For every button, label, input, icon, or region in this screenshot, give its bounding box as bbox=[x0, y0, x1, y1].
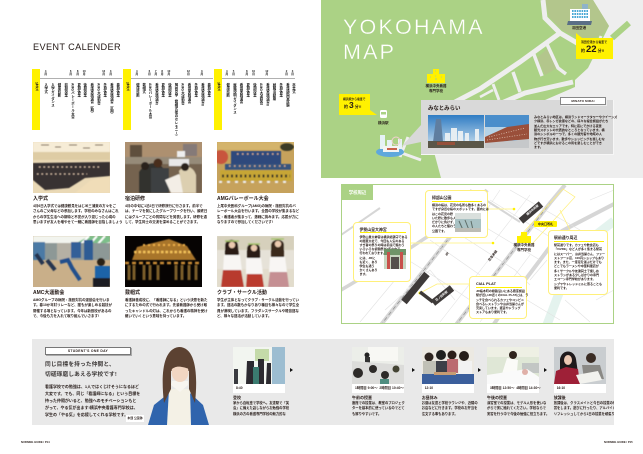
heading: student message: 切磋琢磨しあえる学校です! bbox=[45, 372, 117, 378]
callout: shrine bbox=[353, 222, 411, 282]
heading: cial plat: CIAL PLAT bbox=[476, 280, 496, 286]
heading: entrance ceremony: さんのご父母などの参加します。学校のみなさんはこれ bbox=[33, 209, 119, 213]
text: arrival bbox=[233, 395, 289, 423]
text: morning class bbox=[352, 395, 408, 423]
label: student name bbox=[126, 415, 144, 422]
callout: cial plat bbox=[469, 276, 527, 319]
text: cial plat description: JR桜木町の線路沿いにある商業施設 bbox=[476, 289, 525, 293]
timeline: second year: 解剖見学（戴帽式後のセレモニー） bbox=[174, 83, 178, 138]
timeline: second year: 2年生 bbox=[126, 82, 130, 90]
text: shrine description: には、JRに bbox=[360, 256, 375, 260]
panel: minato mirai bbox=[421, 100, 614, 155]
text: shrine description: いろいろな祈願祭が1年の中で bbox=[360, 247, 400, 251]
photo: valley training bbox=[125, 142, 202, 193]
heading: sports day: す。春10か年対リレーなど、誰もが楽しめる競技が bbox=[33, 303, 112, 307]
heading: valley training bbox=[125, 195, 207, 224]
text: afternoon class bbox=[487, 395, 543, 423]
timeline: second year: 健康診断 bbox=[135, 83, 139, 97]
heading: capping ceremony: 看護師養成校に、「看護師になる」という決意を新た bbox=[125, 298, 207, 302]
timeline: third year: 月 bbox=[285, 72, 288, 76]
heading: volleyball tournament: 生・看護者が集まって、激戦に挑みます。応援が力に bbox=[217, 215, 299, 219]
timeline: first year: 前期授業 bbox=[64, 83, 68, 97]
heading: valley training: にはグループごとの質問などを発表します。研修を通 bbox=[125, 215, 207, 219]
heading: valley training: 4月の中旬に1泊2日で研修旅行に行きます。前半で bbox=[125, 204, 203, 208]
title: yokohama map bbox=[343, 15, 485, 64]
heading: valley training: 宿泊研修 bbox=[125, 196, 145, 202]
timeline: third year: 健康診断 bbox=[226, 83, 230, 97]
label: student name: 木部 公菜弥 bbox=[127, 416, 143, 420]
heading: park: 掃部山公園 bbox=[432, 194, 451, 200]
timeline: third year: 月 bbox=[225, 72, 228, 76]
icon: train bbox=[380, 110, 387, 118]
timeline: second year: 月 bbox=[167, 72, 170, 76]
heading: club activities bbox=[217, 289, 300, 318]
timeline: third year: 月 bbox=[245, 72, 248, 76]
heading: valley training: して、学生同士の交流を深めることができます。 bbox=[125, 220, 200, 224]
label: airport: 羽田空港 bbox=[572, 26, 586, 30]
timeline: first year: 8 bbox=[77, 69, 78, 73]
heading: capping ceremony bbox=[125, 289, 208, 318]
text: cial plat description: 駅が近いJR近くのCIAL PLATには、ラ bbox=[476, 293, 528, 297]
text: student message body: 看護学校での勉強は、1人ではくじけそうになるほど bbox=[45, 384, 139, 389]
heading: entrance ceremony: からの学生生活への期待と不安が入り混じった心境の bbox=[33, 215, 116, 219]
timeline: second year: 月 bbox=[148, 72, 151, 76]
photo: park bbox=[455, 213, 481, 232]
text: park description: いた際に散歩も人 bbox=[432, 216, 456, 220]
text: station street description: 「ViVRE」など人が多く集まる駅前 bbox=[554, 247, 602, 251]
card: morning class: 1時間目 9:00〜 2時間目 10:40〜 bbox=[355, 386, 404, 390]
text: station street description: 駅前通りです。カフェや飲食店も bbox=[554, 243, 599, 247]
timeline: third year: 月 bbox=[265, 72, 268, 76]
text: station street description: エコーン専門学校があります。 bbox=[554, 277, 596, 281]
icon: harbor skyline bbox=[376, 135, 404, 157]
card: afternoon class: 3時間目 12:50〜 4時間目 14:30〜 bbox=[490, 386, 541, 390]
timeline: second year: AMGバレーボール大会 bbox=[148, 83, 152, 119]
timeline: first year: 看護実践演習（I期） bbox=[90, 83, 94, 115]
text: shrine description: 伊勢山皇大神宮は横浜総鎮守である bbox=[360, 234, 407, 238]
heading: volleyball tournament bbox=[217, 195, 300, 224]
label: school name bbox=[426, 84, 446, 93]
timeline: second year: 7 bbox=[155, 69, 157, 73]
timeline: first year: 月 bbox=[69, 72, 72, 76]
timeline: second year: 看護実践演習II bbox=[200, 83, 204, 106]
heading: student message: 同じ目標を持った仲間と、 bbox=[45, 362, 115, 368]
heading: entrance ceremony: 思いますが友人を増やせて一緒に看護師を目指しましょう bbox=[33, 220, 122, 224]
text: shrine description: 行われております。学校では bbox=[360, 251, 398, 255]
text: minato mirai description: 浜のシンボルの一つで、多くの観光客や地域の人 bbox=[534, 132, 602, 136]
timeline: third year: 月 bbox=[252, 72, 255, 76]
heading: station street: 駅前通り周辺 bbox=[554, 234, 577, 240]
timeline: third year: 就職活動期 bbox=[272, 83, 276, 100]
text: morning class: も解りやすいです。 bbox=[352, 412, 381, 416]
text: park description: だかりに負けず、 bbox=[432, 220, 456, 224]
card: arrival at school bbox=[233, 339, 289, 425]
timeline: first year: 後期授業 bbox=[83, 83, 87, 97]
callout: 3 minutes from yokohama station bbox=[339, 94, 377, 115]
text: student message body: 持った仲間がいると、勉強へのモチベーションもと bbox=[45, 398, 136, 403]
timeline: second year: 冬期休業 bbox=[194, 83, 198, 97]
photo: shrine bbox=[384, 249, 406, 269]
timeline: second year: 8 bbox=[161, 69, 163, 73]
title: yokohama map: MAP bbox=[343, 40, 396, 64]
text: shrine description: の関東大社で、今回も人気のある bbox=[360, 239, 404, 243]
tag: school surroundings bbox=[342, 185, 373, 200]
text: minato mirai description: 観光スポットの代表的なところとなっています。横 bbox=[534, 128, 605, 132]
panel: school surroundings bbox=[341, 184, 614, 324]
tag: minato mirai: MINATO MIRAI bbox=[571, 99, 595, 103]
label: school name: 専門学校 bbox=[429, 89, 443, 93]
heading: capping ceremony: ったキャンドルの灯は、これからも看護の精神を受け bbox=[125, 309, 208, 313]
text: park description: 横浜の桜は、花見の名所も数多くあるの bbox=[432, 203, 486, 207]
text: station street description: ストランがある少しばかりの専門 bbox=[554, 273, 599, 277]
text: station street description bbox=[554, 243, 605, 290]
timeline: second year: 月 bbox=[154, 72, 157, 76]
heading: valley training: は、テーマを発にしたグループワークを行い、最終日 bbox=[125, 209, 207, 213]
callout: 3 minutes from yokohama station: 約3分!! bbox=[344, 100, 361, 110]
photo: sports day bbox=[33, 236, 110, 287]
timeline: third year: 2 bbox=[286, 69, 287, 73]
photo: student portrait bbox=[148, 345, 210, 425]
card: after school: 16:10 bbox=[557, 386, 565, 390]
callout: 3 minutes from yokohama station: 横浜駅から電車で bbox=[343, 96, 365, 100]
heading: club activities: 員が満喫しています。フラダンスサークルや軽音部な bbox=[217, 309, 299, 313]
tag: student's one day: STUDENT'S ONE DAY bbox=[68, 349, 108, 353]
timeline: second year bbox=[123, 69, 213, 138]
timeline: second year: 10 bbox=[167, 69, 170, 73]
timeline: first year: 12 bbox=[102, 69, 105, 73]
heading: sports day: で、今後も力を入れて取り組んでいきます! bbox=[33, 314, 99, 318]
timeline: first year: 入学ガイダンス bbox=[50, 83, 54, 107]
text: afternoon class: 午後の授業 bbox=[487, 395, 507, 400]
heading: capping ceremony: 継いでいくという意味を持っています。 bbox=[125, 314, 186, 318]
timeline: first year: 月 bbox=[76, 72, 79, 76]
text: station street description: にはスーパー、お弁当屋さん、ファー bbox=[554, 252, 605, 256]
text: afternoon class: 実習を行う中で今後の勉強に役立ちます。 bbox=[487, 412, 549, 416]
heading: club activities: 学生が主体となってクラブ・サークル活動を行ってい bbox=[217, 298, 299, 302]
card: afternoon class bbox=[487, 339, 543, 425]
timeline: third year: 就職説明ガイダンス bbox=[232, 83, 236, 114]
photo: red brick warehouse bbox=[485, 115, 529, 148]
title: yokohama map: YOKOHAMA bbox=[343, 15, 485, 39]
heading: shrine: 伊勢山皇大神宮 bbox=[360, 226, 387, 232]
map: streets around the school bbox=[342, 185, 613, 323]
label: station, rail names bbox=[400, 204, 540, 302]
timeline: third year bbox=[214, 69, 296, 130]
label: station, rail names: 桜木町駅 bbox=[400, 285, 410, 297]
timeline: third year: 3 bbox=[292, 69, 293, 73]
timeline: first year: 看護実践演習（II期） bbox=[109, 83, 113, 116]
timeline: first year: 春期休業 bbox=[116, 83, 120, 97]
timeline: first year: 健康診断 bbox=[57, 83, 61, 97]
text: lunch break bbox=[422, 395, 478, 423]
timeline: first year: 夏期休業 bbox=[77, 83, 81, 97]
label: station, rail names: 日ノ出町駅 bbox=[434, 290, 449, 302]
icon: airport building bbox=[567, 4, 592, 25]
card: arrival at school: 8:40 bbox=[236, 386, 243, 390]
text: park description: 公園です。 bbox=[432, 229, 447, 233]
map: green land and roads bbox=[321, 0, 643, 178]
timeline: third year: 夏期休業 bbox=[246, 83, 250, 97]
heading: sports day: AMC大運動会 bbox=[33, 290, 64, 296]
text: minato mirai description: どですが横浜におけるこの街を楽しむことができ bbox=[534, 141, 602, 145]
callout: 22 minutes from airport: 羽田空港から電車で bbox=[581, 40, 607, 44]
photo: entrance ceremony bbox=[33, 142, 110, 193]
label: school name: 横浜中央看護 bbox=[426, 84, 446, 88]
tag: student's one day bbox=[45, 347, 131, 355]
timeline: third year: 後期授業 bbox=[252, 83, 256, 97]
heading: volleyball tournament: 上尾中央医科グループ(AMG)の病院・施設対抗のバ bbox=[217, 204, 296, 208]
text: afternoon class: がらで実に触れてください。学校ならで bbox=[487, 406, 546, 410]
heading: sports day: 開催する場となっています。今年は新設校があるの bbox=[33, 309, 111, 313]
timeline: first year: 月 bbox=[102, 72, 105, 76]
text: arrival: 登校 bbox=[233, 395, 241, 400]
timeline: first year: AMG大運動会 bbox=[96, 83, 100, 105]
arrow bbox=[478, 368, 481, 372]
timeline: first year bbox=[32, 69, 122, 130]
text: shrine description: すぎ者の祭りの時は参詣で賑わう bbox=[360, 243, 405, 247]
text: arrival: 会」に備えた話しながらお勉強の学校 bbox=[233, 406, 289, 410]
callout: 22 minutes from airport bbox=[576, 33, 613, 59]
timeline: first year: AMGバレーボール大会 bbox=[70, 83, 74, 119]
photo: skyline bbox=[428, 115, 484, 148]
timeline: third year: 看護実践演習 bbox=[239, 83, 243, 104]
label: school name: 専門学校 bbox=[517, 248, 531, 252]
text: station street description: どこでもラーメンや中華料理店が bbox=[554, 264, 599, 268]
heading: entrance ceremony: 入学式 bbox=[33, 196, 48, 202]
heading: entrance ceremony bbox=[33, 195, 122, 224]
timeline: second year: 3 bbox=[201, 69, 203, 73]
heading: volleyball tournament: なりますので参加してくださいです! bbox=[217, 220, 273, 224]
photo: capping ceremony bbox=[125, 236, 202, 287]
text: minato mirai description: ます。 bbox=[534, 145, 543, 149]
timeline: second year: 夏期休業 bbox=[161, 83, 165, 97]
text: minato mirai description: 物が行き交います。散歩やショッピングを楽しむな bbox=[534, 137, 605, 141]
arrow bbox=[544, 368, 547, 372]
timeline: third year: 月 bbox=[232, 72, 235, 76]
text: lunch break: お昼は友達と学校ラウンジや、近隣の bbox=[422, 401, 478, 405]
timeline: second year: 春期休業 bbox=[207, 83, 211, 97]
timeline: first year: 月 bbox=[83, 72, 86, 76]
text: morning class: 座席での授業は、教室のプロジェク bbox=[352, 401, 405, 405]
text: station street description: 多くサークルや友達同士で楽しめ bbox=[554, 269, 599, 273]
text: park description: はこの花見の際 bbox=[432, 212, 453, 216]
text: station street description: ストフード店、100円ショップもあり bbox=[554, 256, 604, 260]
timeline: second year: 月 bbox=[187, 72, 190, 76]
timeline: second year: 4 bbox=[136, 69, 138, 73]
timeline: second year: 月 bbox=[161, 72, 164, 76]
text: shrine description: も近く、あり bbox=[360, 260, 378, 264]
timeline: third year: 4 bbox=[226, 69, 228, 73]
tag: school surroundings: 学校周辺 bbox=[349, 190, 366, 195]
photo: club activities bbox=[217, 236, 294, 287]
text: cial plat description: ストアもあり便利です。 bbox=[476, 310, 509, 314]
timeline: first year: 1年生 bbox=[35, 82, 39, 90]
callout: 22 minutes from airport: 約22分!! bbox=[581, 44, 604, 55]
timeline: first year: 入学式 bbox=[44, 83, 48, 93]
heading: sports day: AMGグループの病院・施設対抗の運動会を行いま bbox=[33, 298, 110, 302]
label: station, rail names: 横浜中央駅 bbox=[525, 204, 540, 216]
text: station street description: 便利です。 bbox=[554, 286, 569, 290]
text: shrine description: 学生も通う bbox=[360, 264, 375, 268]
tag: central gate bbox=[534, 221, 557, 227]
timeline: third year: 8 bbox=[246, 69, 248, 73]
timeline: third year: 月 bbox=[291, 72, 294, 76]
text: minato mirai description: 並んだ広大なエリアです。特に夜にでかける夜景 bbox=[534, 124, 602, 128]
heading: sports day bbox=[33, 289, 112, 318]
timeline: third year: 10 bbox=[252, 69, 255, 73]
text: park description: の人たちと賑わう bbox=[432, 224, 456, 228]
text: cial plat description: 充実しています。雑貨やドラッグ bbox=[476, 306, 521, 310]
text: after school bbox=[554, 395, 610, 423]
timeline: second year: 月 bbox=[200, 72, 203, 76]
text: student message body: がって、やる気が出ます!横浜中央看護専門学校は、 bbox=[45, 405, 138, 410]
heading: club activities: ます。部活の数もかなりあり種目も様々なので学生全 bbox=[217, 303, 299, 307]
timeline: second year: 月 bbox=[135, 72, 138, 76]
text: morning class: ターを基本的に使っているのでとて bbox=[352, 406, 404, 410]
heading: capping ceremony: 戴帽式 bbox=[125, 290, 140, 296]
photo: volleyball tournament bbox=[217, 142, 294, 193]
heading: club activities: クラブ・サークル活動 bbox=[217, 290, 267, 296]
text: after school: 放課後 bbox=[554, 395, 566, 400]
text: student message body: 大変です。でも、同じ「看護師になる」という目標を bbox=[45, 391, 140, 396]
heading: capping ceremony: にするための式で行われます。先輩看護師から受け取 bbox=[125, 303, 207, 307]
text: minato mirai description bbox=[534, 115, 618, 149]
footer: right page number: NURSING GUIDE / P15 bbox=[604, 441, 633, 444]
timeline: third year: 3年生 bbox=[217, 82, 221, 90]
label: station, rail names: 京急本線 bbox=[487, 250, 498, 262]
heading: minato mirai: みなとみらい bbox=[428, 106, 460, 112]
text: student message body bbox=[45, 384, 140, 417]
text: shrine description bbox=[360, 234, 408, 276]
timeline: first year: 月 bbox=[44, 72, 47, 76]
text: shrine description: ます。 bbox=[360, 272, 368, 276]
panel: yokohama map bbox=[321, 0, 643, 178]
timeline: second year: 看護実践演習 bbox=[187, 83, 191, 104]
text: park description bbox=[432, 203, 489, 233]
timeline: third year: 看護師国家試験 bbox=[285, 83, 289, 107]
text: lunch break: 注文する事もあります。 bbox=[422, 412, 458, 416]
heading: event calender: EVENT CALENDER bbox=[33, 42, 121, 52]
timeline: second year: 12 bbox=[187, 69, 190, 73]
tag: minato mirai bbox=[560, 97, 606, 104]
footer: left page number: NURSING GUIDE / P14 bbox=[21, 441, 50, 444]
timeline: second year: 6 bbox=[149, 69, 150, 73]
label: school name: 横浜中央看護 bbox=[514, 243, 534, 247]
timeline: first year: 4 bbox=[45, 69, 46, 73]
text: station street description: ます。また、一度足を運ぶだけでも bbox=[554, 260, 602, 264]
callout: station street bbox=[548, 230, 608, 295]
timeline: second year: 後期授業 bbox=[167, 83, 171, 97]
timeline: second year: 看護実践演習I bbox=[154, 83, 158, 105]
text: minato mirai description: みなとみらい地区は、横浜ランドマークタワーやクイーンズ bbox=[534, 115, 617, 119]
timeline: third year: 冬期休業 bbox=[279, 83, 283, 97]
card: lunch break: 12:10 bbox=[425, 386, 433, 390]
text: arrival: 横浜の方の看護専門学校の魅力的な bbox=[233, 412, 286, 416]
heading: entrance ceremony: 4月6日入学式では健康鶴見をはじめ三浦東の方々をご bbox=[33, 204, 116, 208]
text: lunch break: お昼休み bbox=[422, 395, 438, 400]
label: yokohama station: 横浜駅 bbox=[378, 121, 388, 125]
card: morning class bbox=[352, 339, 408, 425]
timeline: first year: 10 bbox=[83, 69, 86, 73]
timeline: third year: 卒業式 bbox=[291, 83, 295, 93]
tag: central gate: 中央口改札 bbox=[538, 222, 553, 226]
text: cial plat description bbox=[476, 289, 528, 314]
text: arrival: 家から自転車で学校へ。友達駅で「英 bbox=[233, 401, 289, 405]
text: minato mirai description: ク横浜、赤レンガ倉庫などの、様々な複合施設がたち bbox=[534, 119, 608, 123]
card: lunch break bbox=[422, 339, 478, 425]
text: station street description: シブヤやトレッドミルに寄ることも bbox=[554, 282, 602, 286]
text: lunch break: お店などに行きます。学校のお弁当を bbox=[422, 406, 477, 410]
heading: volleyball tournament: AMGバレーボール大会 bbox=[217, 196, 269, 202]
text: student message body: 学生の「やる気」を応援してくれる学校です。 bbox=[45, 412, 128, 417]
timeline: first year: 3 bbox=[110, 69, 111, 73]
timeline: first year: 6 bbox=[70, 69, 71, 73]
icon: school bbox=[427, 69, 445, 83]
heading: student message bbox=[45, 360, 117, 378]
card: after school bbox=[554, 339, 610, 425]
heading: club activities: ど、様々な部活が活動しています。 bbox=[217, 314, 271, 318]
timeline: first year: 月 bbox=[109, 72, 112, 76]
text: cial plat description: 食べるレストランやお弁当屋さんが bbox=[476, 302, 524, 306]
label: station, rail names: JR bbox=[444, 251, 450, 257]
callout: park bbox=[425, 190, 488, 238]
text: cial plat description: ンチを食べられるカフェやコンビニ bbox=[476, 298, 524, 302]
arrow bbox=[412, 368, 415, 372]
timeline: first year: 冬期休業 bbox=[103, 83, 107, 97]
arrow bbox=[290, 368, 293, 372]
timeline: third year: 看護実践演習II bbox=[265, 83, 269, 106]
text: afternoon class: 演習室での授業は、モデル人形を使いな bbox=[487, 401, 546, 405]
heading: volleyball tournament: レーボール大会を行います。全国の学校が集まるなど bbox=[217, 209, 299, 213]
text: morning class: 午前の授業 bbox=[352, 395, 372, 400]
icon: school bbox=[517, 232, 531, 243]
panel: student's one day bbox=[32, 339, 614, 425]
timeline: third year: 12 bbox=[265, 69, 268, 73]
timeline: third year: 5 bbox=[233, 69, 234, 73]
text: shrine description: かくさんあり bbox=[360, 268, 378, 272]
timeline: third year: AMG大運動会 bbox=[259, 83, 263, 105]
timeline: second year: AMG大運動会 bbox=[180, 83, 184, 105]
text: park description: ですが身近な桜のスポットです。園内には bbox=[432, 207, 489, 211]
label: school name bbox=[514, 242, 534, 252]
timeline: second year: 戴帽式 bbox=[142, 83, 146, 93]
